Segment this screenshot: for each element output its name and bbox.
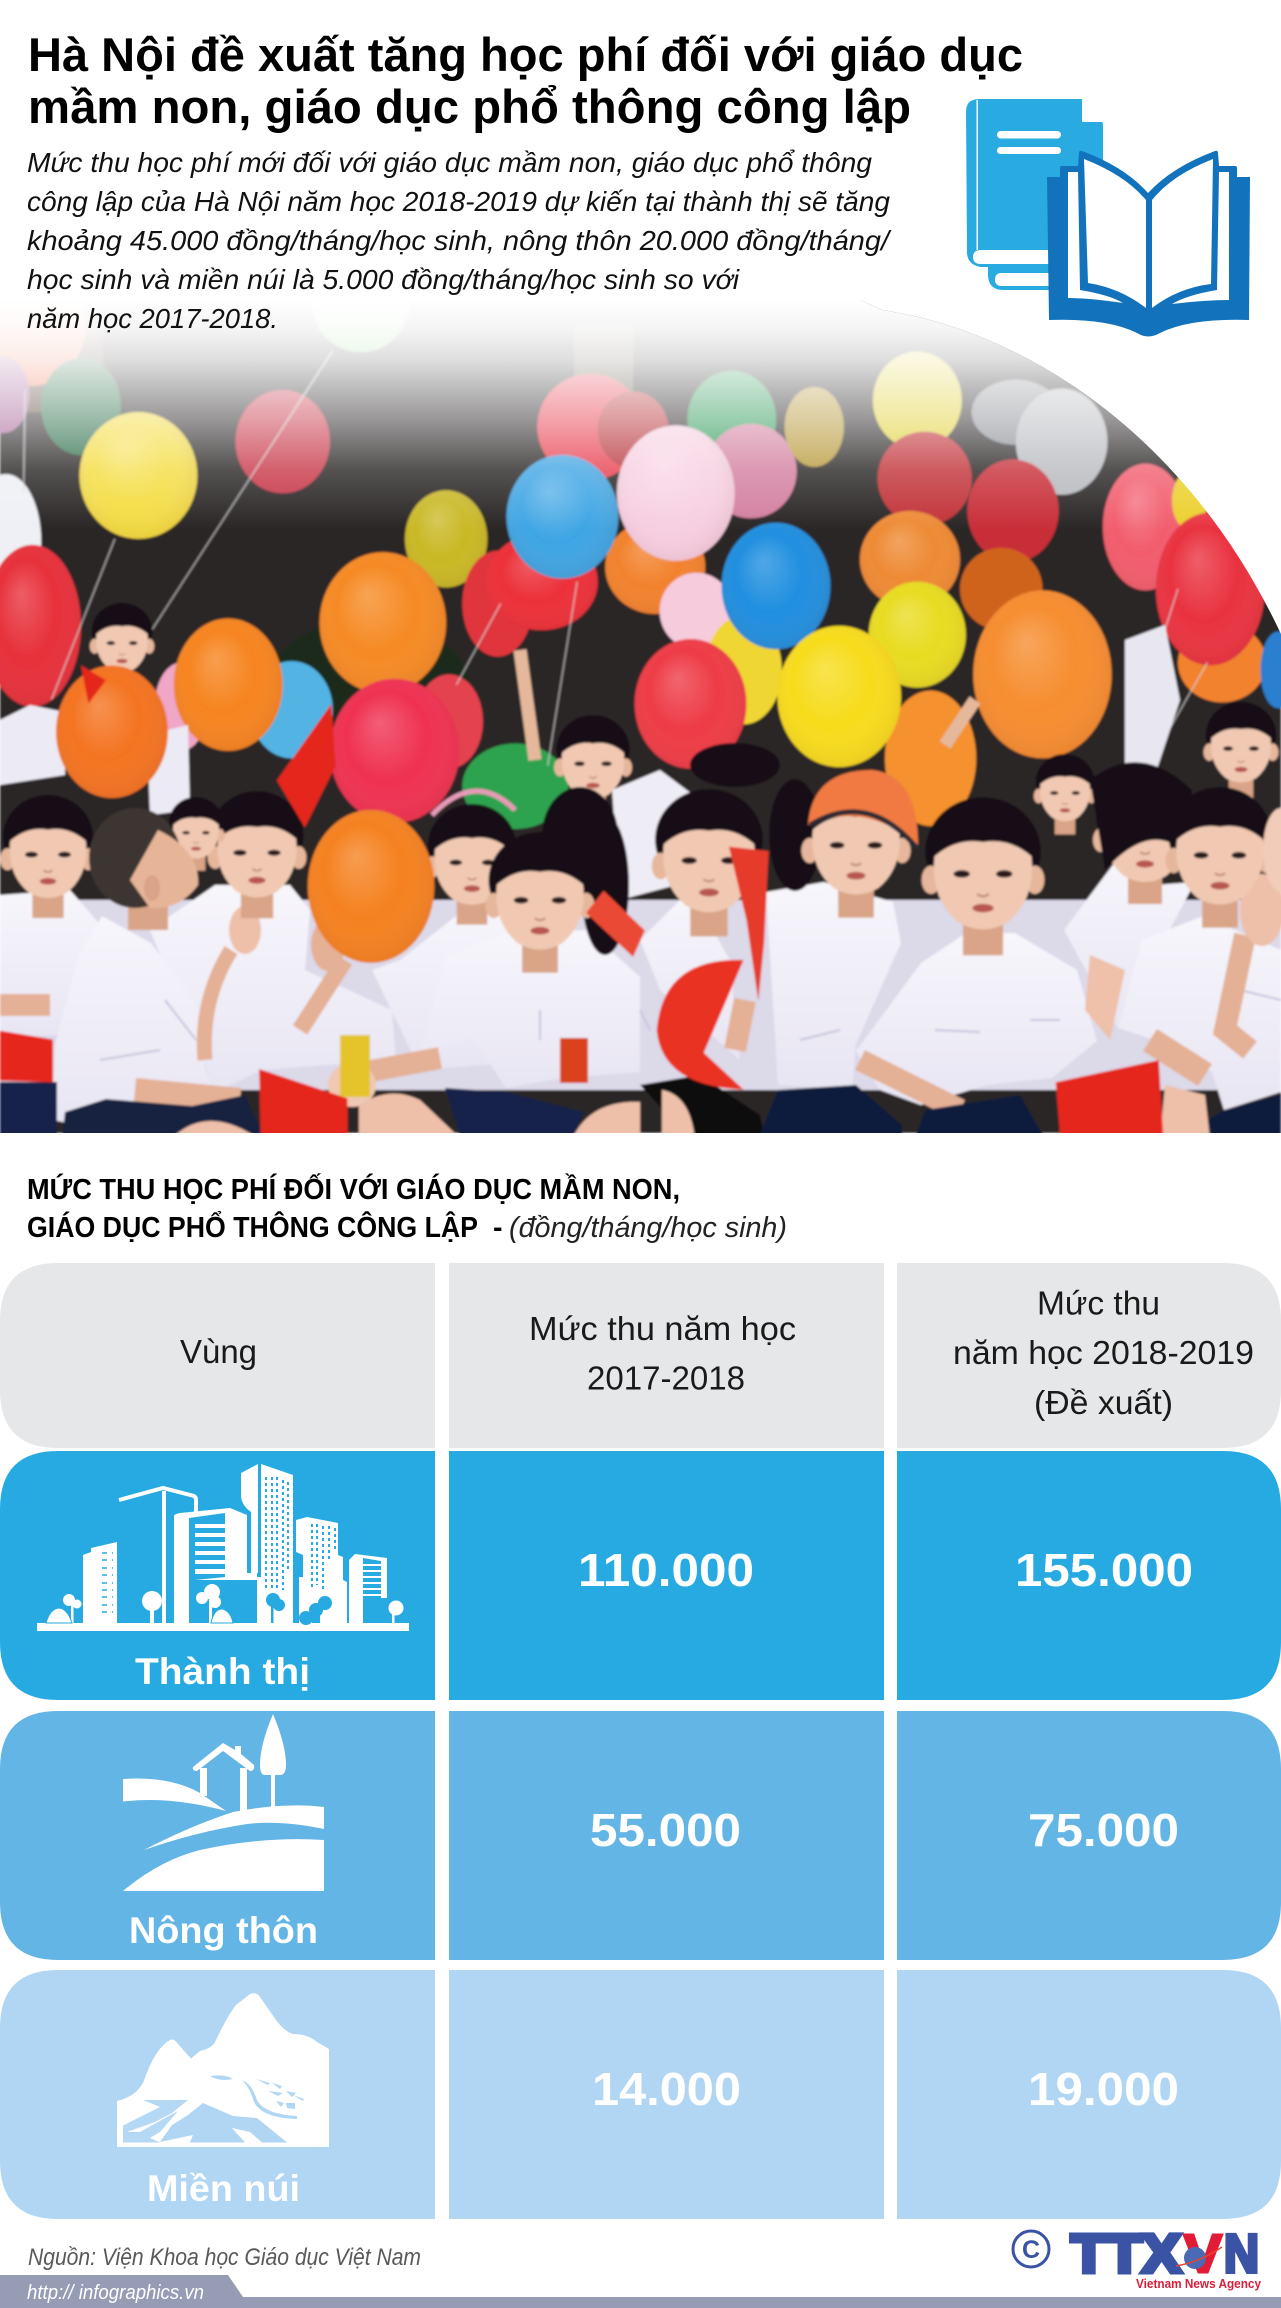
title [28, 28, 1023, 133]
intro paragraph: năm học 2017-2018. [27, 303, 278, 334]
icon: books [966, 99, 1250, 336]
icon: city [37, 1464, 409, 1631]
values: Thành thị: 110.000 [578, 1544, 754, 1596]
values: Thành thị [578, 1544, 1193, 1596]
table header row: Vùng [180, 1334, 257, 1371]
intro paragraph: Mức thu học phí mới đối với giáo dục mầm non, giáo dục phổ thông [27, 147, 872, 178]
intro paragraph: khoảng 45.000 đồng/tháng/học sinh, nông thôn 20.000 đồng/tháng/ [27, 225, 892, 256]
values: Nông thôn [590, 1804, 1179, 1856]
label: Nông thôn: Nông thôn [129, 1910, 318, 1951]
values: Miền núi [592, 2063, 1179, 2115]
intro paragraph: công lập của Hà Nội năm học 2018-2019 dự kiến tại thành thị sẽ tăng [27, 186, 890, 217]
table header row: Mức thu [1037, 1286, 1160, 1322]
intro paragraph [27, 147, 892, 334]
logo: TTXVN: V [1184, 2224, 1222, 2284]
values: Miền núi: 19.000 [1028, 2063, 1179, 2115]
logo: TTXVN: TTX [1071, 2224, 1181, 2284]
values: Miền núi: 14.000 [592, 2063, 741, 2115]
shorts and legs [0, 1075, 1281, 1139]
front balloons [56, 666, 744, 1090]
logo: TTXVN: Vietnam News Agency [1136, 2276, 1262, 2291]
shirt shadows and skin [0, 874, 1281, 1110]
section heading: (đồng/tháng/học sinh) [509, 1212, 787, 1244]
icon: mountains [117, 1993, 329, 2147]
title: mầm non, giáo dục phổ thông công lập [28, 80, 911, 133]
values: Nông thôn: 75.000 [1028, 1804, 1179, 1856]
copyright symbol: C [1022, 2236, 1040, 2264]
section heading [27, 1173, 787, 1244]
flags [0, 666, 1163, 1135]
source note: Nguồn: Viện Khoa học Giáo dục Việt Nam [28, 2244, 421, 2271]
table header row: năm học 2018-2019 [953, 1335, 1254, 1372]
background children [0, 603, 1278, 900]
values: Thành thị: 155.000 [1015, 1544, 1193, 1596]
white fade at the top of the photo [0, 300, 1210, 518]
footer bar: http:// infographics.vn [27, 2282, 204, 2304]
boy seen from the side [89, 808, 198, 930]
row: Nông thôn [0, 1711, 1281, 1960]
title: Hà Nội đề xuất tăng học phí đối với giáo dục [28, 28, 1023, 81]
section heading: MỨC THU HỌC PHÍ ĐỐI VỚI GIÁO DỤC MẦM NON, [27, 1173, 680, 1206]
crowd backdrop [0, 300, 1281, 1133]
table header row: 2017-2018 [587, 1360, 745, 1398]
label: Miền núi: Miền núi [147, 2168, 300, 2209]
section heading: GIÁO DỤC PHỔ THÔNG CÔNG LẬP [27, 1211, 478, 1244]
balloon strings [24, 350, 1207, 766]
row: Thành thị [0, 1451, 1281, 1700]
values: Nông thôn: 55.000 [590, 1804, 741, 1856]
footer bar [0, 2275, 1281, 2308]
icon: countryside house [123, 1714, 324, 1891]
label: Thành thị: Thành thị [135, 1651, 310, 1692]
table header row: Mức thu năm học [529, 1311, 796, 1348]
trees [46, 1584, 404, 1623]
row: Miền núi [0, 1970, 1281, 2219]
logo: TTXVN: N [1224, 2224, 1259, 2284]
section heading: - [493, 1212, 502, 1244]
table header row: (Đề xuất) [1034, 1385, 1173, 1422]
photo: children with balloons [0, 252, 1281, 1139]
intro paragraph: học sinh và miền núi là 5.000 đồng/tháng/học sinh so với [27, 264, 740, 295]
white shirts [0, 858, 1281, 1130]
copyright symbol [1013, 2231, 1049, 2267]
table header row [0, 1263, 1281, 1448]
logo: TTXVN [1071, 2224, 1262, 2291]
balloons: middle layer [0, 412, 1281, 829]
front children heads [0, 762, 1281, 973]
